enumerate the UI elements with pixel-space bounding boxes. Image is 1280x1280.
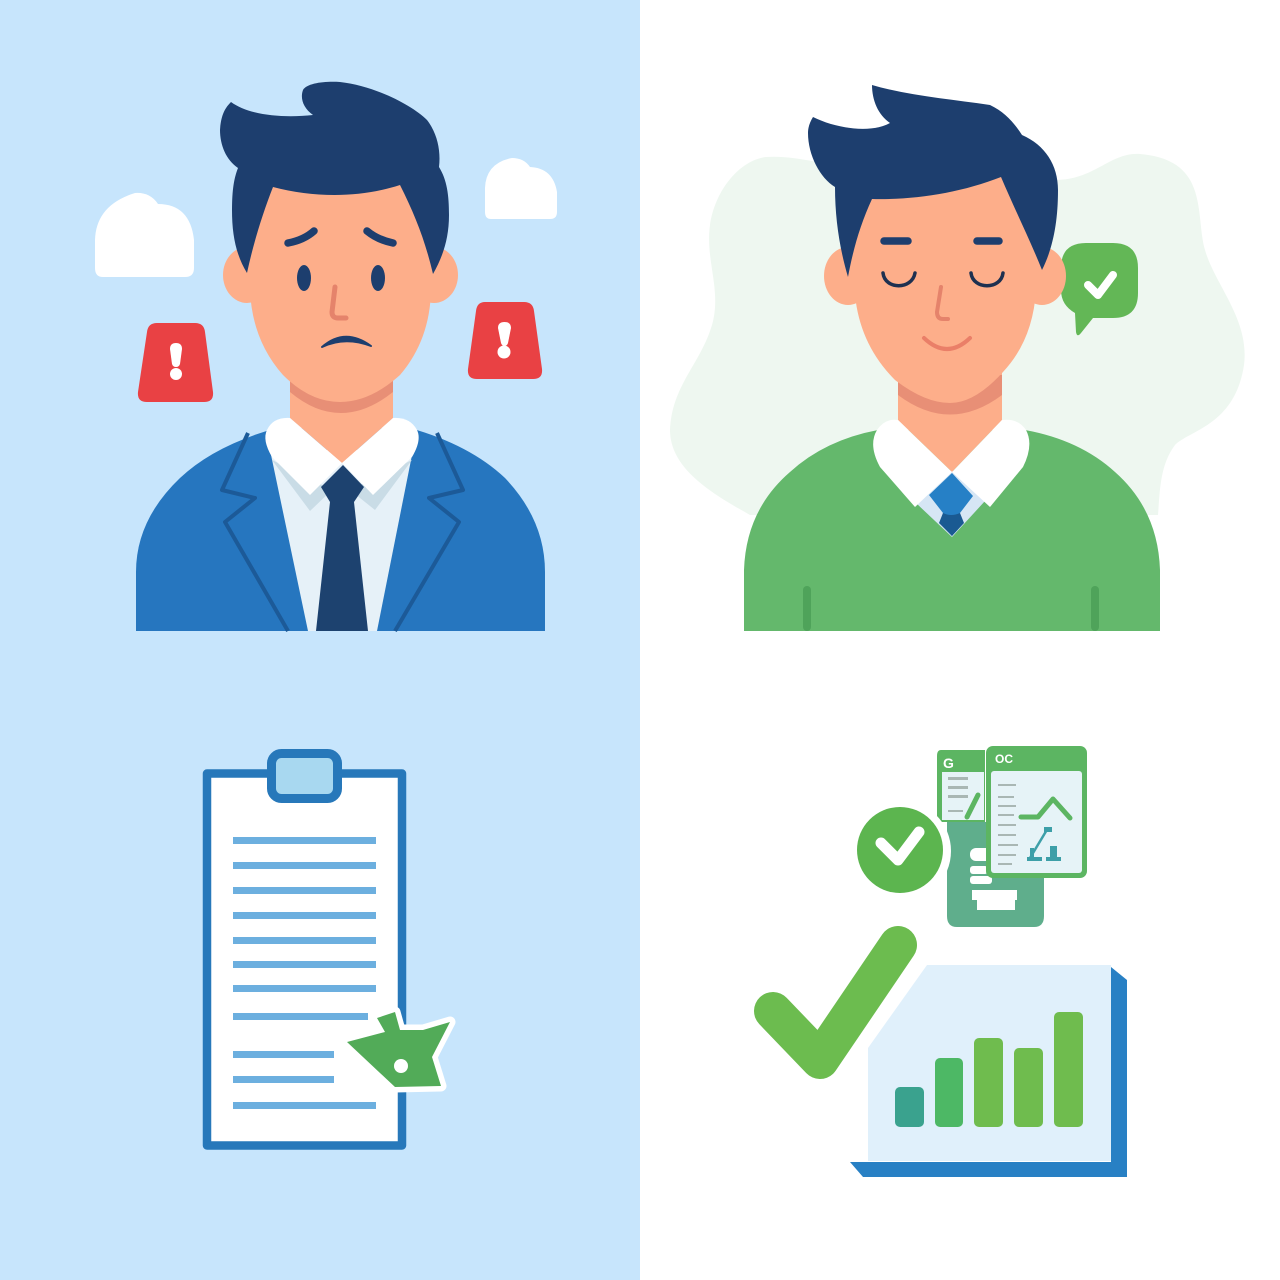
eyebrows bbox=[288, 231, 393, 243]
panel: left background bbox=[0, 0, 640, 1280]
panel: right background bbox=[640, 0, 1280, 1280]
device cutouts bbox=[970, 848, 1017, 910]
green blob background bbox=[670, 140, 1245, 515]
green tag bbox=[347, 1012, 450, 1087]
shirt v bbox=[916, 470, 985, 537]
tie bbox=[316, 465, 368, 631]
lapel lines bbox=[222, 433, 463, 631]
teal glyphs bbox=[1027, 827, 1061, 861]
collar bbox=[265, 418, 342, 495]
bars bbox=[895, 1087, 924, 1127]
ears bbox=[824, 247, 872, 305]
neck shadow bbox=[290, 375, 393, 413]
report rows bbox=[998, 784, 1018, 865]
sleeve seams bbox=[803, 586, 811, 631]
front report heading: OC bbox=[995, 752, 1013, 766]
neck bbox=[898, 370, 1002, 472]
back device bbox=[947, 822, 1044, 927]
nose bbox=[937, 287, 948, 319]
calm man illustration bbox=[744, 85, 1160, 631]
face bbox=[250, 175, 431, 402]
nose bbox=[332, 287, 346, 318]
collar bbox=[873, 420, 952, 507]
icon: left alert bbox=[138, 323, 213, 402]
face bbox=[853, 175, 1036, 403]
bar chart card bbox=[850, 965, 1127, 1177]
icon: speech bubble check bbox=[1061, 243, 1138, 335]
neck bbox=[290, 370, 393, 463]
icon: right alert bbox=[468, 302, 542, 379]
hair bbox=[808, 85, 1058, 277]
check badge bbox=[849, 800, 951, 902]
jacket bbox=[136, 428, 545, 631]
card face bbox=[868, 965, 1111, 1161]
icon: left cloud bbox=[95, 193, 194, 277]
sweater bbox=[744, 430, 1160, 631]
back report heading: G bbox=[943, 755, 954, 771]
eyebrows bbox=[884, 237, 999, 245]
eyes bbox=[297, 265, 311, 291]
icon: right cloud bbox=[485, 158, 557, 219]
tie bbox=[929, 473, 973, 536]
clip bbox=[272, 754, 338, 798]
large check mark bbox=[773, 945, 898, 1060]
ears bbox=[223, 247, 271, 303]
reports cluster bbox=[849, 746, 1087, 927]
front report bbox=[986, 746, 1087, 878]
shirt bbox=[270, 450, 413, 631]
collar shadow bbox=[272, 460, 412, 511]
card depth bbox=[850, 967, 1127, 1177]
closed eyes bbox=[883, 273, 1003, 286]
stressed man illustration bbox=[136, 82, 545, 631]
line chart bbox=[1021, 799, 1070, 818]
back report bbox=[937, 750, 985, 822]
mouth bbox=[322, 337, 371, 347]
clipboard bbox=[207, 754, 450, 1146]
text lines bbox=[233, 837, 376, 1109]
hair bbox=[220, 82, 449, 274]
smile bbox=[924, 338, 970, 349]
